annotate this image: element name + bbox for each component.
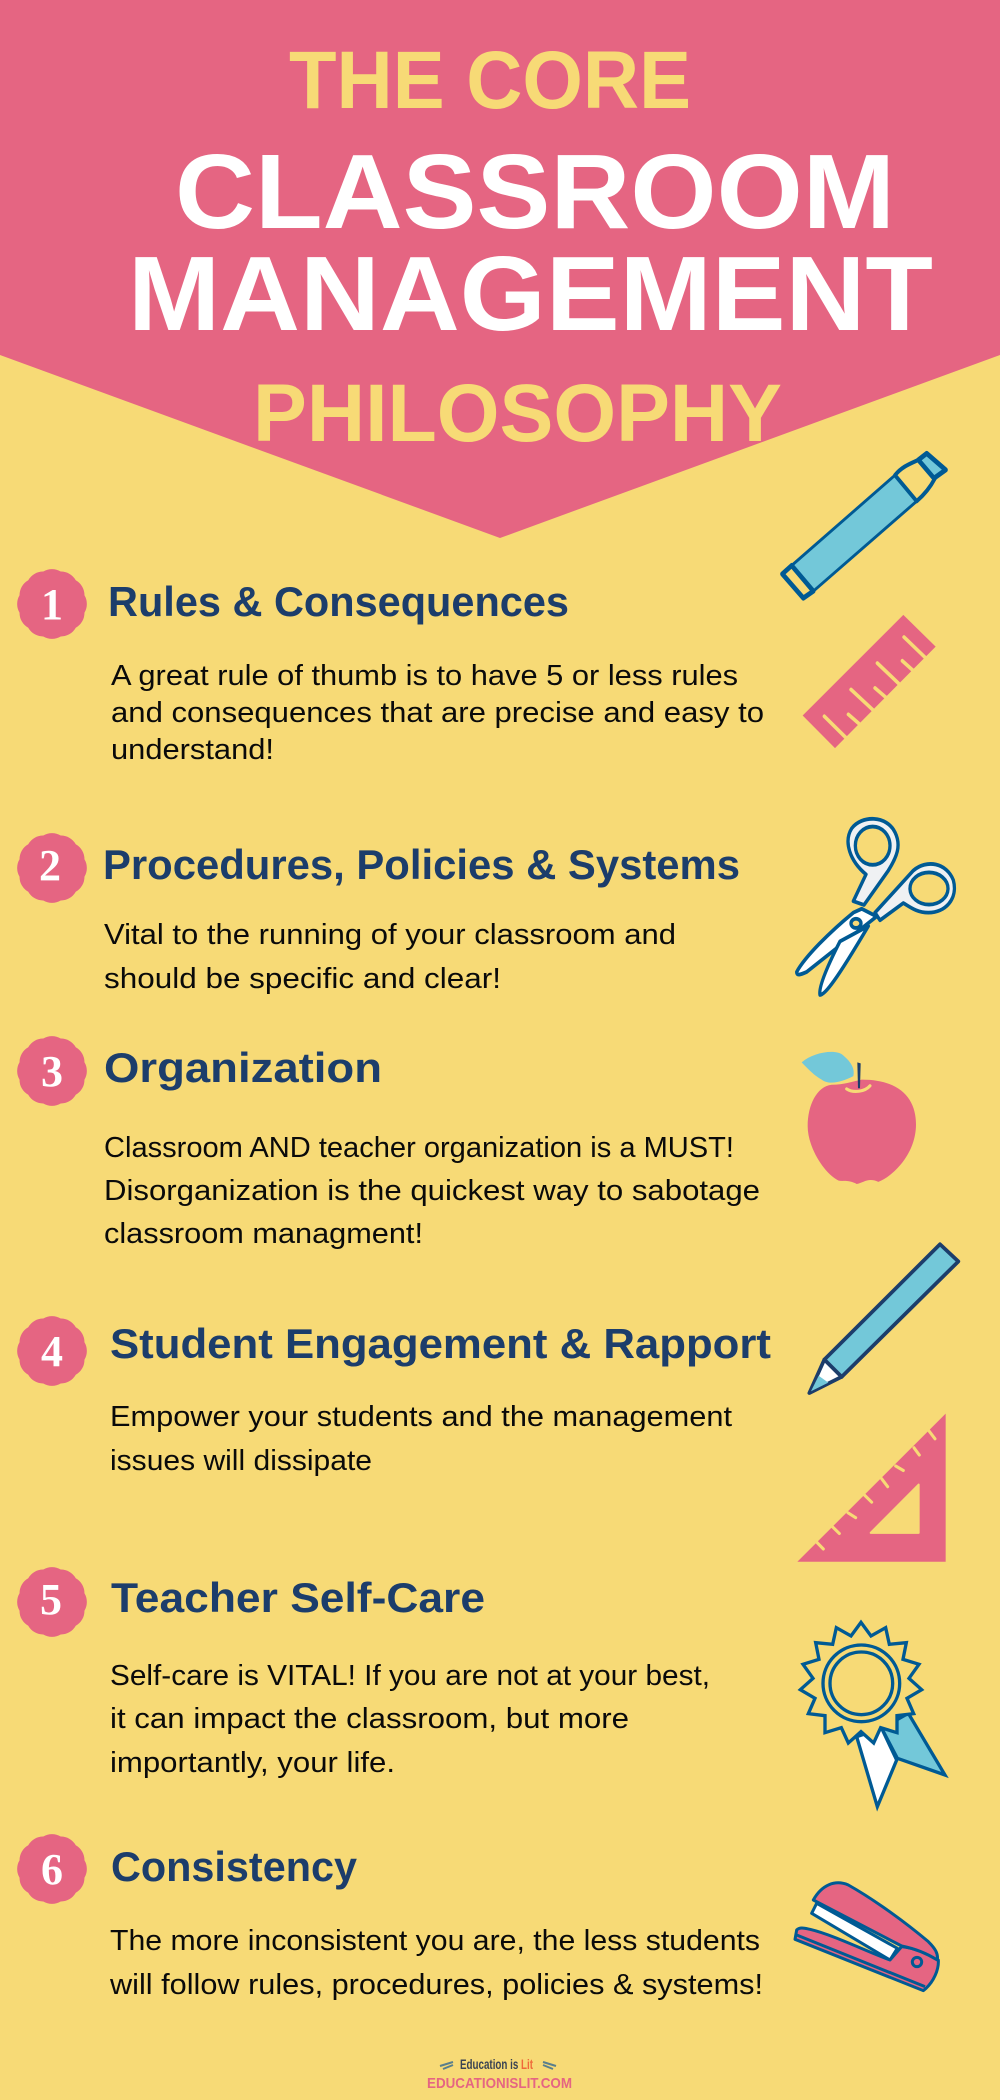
body text 1 [111, 660, 764, 766]
heading 1: Rules & Consequences [108, 578, 569, 625]
panel: student engagement and rapport [10, 1309, 771, 1477]
body text 4: issues will dissipate [110, 1445, 372, 1477]
panel: teacher self-care [10, 1560, 710, 1779]
icon: apple [802, 1052, 916, 1184]
heading 3: Organization [104, 1044, 382, 1091]
number badge 3: 3 [41, 1047, 63, 1096]
number badge 2 [10, 826, 94, 910]
heading 6: Consistency [111, 1843, 358, 1890]
panel: procedures, policies and systems [10, 826, 740, 995]
arrow marks right [543, 2062, 556, 2069]
body text 5: importantly, your life. [110, 1747, 395, 1779]
body text 5: Self-care is VITAL! If you are not at your best, [110, 1660, 710, 1692]
body text 3 [104, 1132, 760, 1250]
icon: scissors [797, 819, 954, 995]
body text 3: classroom managment! [104, 1218, 423, 1250]
icon: ruler [803, 615, 936, 748]
body text 6: will follow rules, procedures, policies & systems! [109, 1969, 763, 2001]
body text 4 [110, 1401, 732, 1477]
body text 6: The more inconsistent you are, the less students [110, 1925, 760, 1957]
title line: the core: THE CORE [289, 35, 691, 126]
icon: award ribbon [800, 1622, 945, 1807]
number badge 1 [10, 562, 94, 646]
number badge 6 [10, 1827, 94, 1911]
body text 1: and consequences that are precise and easy to [111, 697, 764, 729]
title [128, 35, 933, 459]
heading 5: Teacher Self-Care [111, 1574, 485, 1621]
icon: pencil [809, 1244, 958, 1393]
number badge 4: 4 [41, 1327, 63, 1376]
icon: set square [797, 1414, 946, 1562]
body text 2: should be specific and clear! [104, 963, 501, 995]
title line: classroom: CLASSROOM [175, 133, 895, 251]
footer logo [427, 2056, 572, 2092]
body text 2 [104, 919, 676, 995]
brand name: Education is Lit [460, 2056, 533, 2072]
heading 4: Student Engagement & Rapport [110, 1320, 771, 1367]
number badge 2: 2 [39, 841, 61, 890]
number badge 5: 5 [40, 1575, 62, 1624]
body text 3: Classroom AND teacher organization is a MUST! [104, 1132, 734, 1164]
website url: EDUCATIONISLIT.COM [427, 2075, 572, 2092]
number badge 3 [10, 1029, 94, 1113]
arrow marks left [440, 2062, 453, 2069]
body text 1: understand! [111, 734, 274, 766]
body text 3: Disorganization is the quickest way to sabotage [104, 1175, 760, 1207]
title line: management: MANAGEMENT [128, 235, 933, 353]
icon: marker [782, 453, 946, 598]
panel: rules and consequences [10, 562, 764, 766]
body text 5 [110, 1660, 710, 1779]
header banner [0, 0, 1000, 538]
number badge 1: 1 [41, 580, 63, 629]
body text 1: A great rule of thumb is to have 5 or less rules [111, 660, 738, 692]
icon: stapler [795, 1883, 938, 1991]
panel: organization [10, 1029, 760, 1250]
number badge 5 [10, 1560, 94, 1644]
body text 4: Empower your students and the management [110, 1401, 732, 1433]
number badge 6: 6 [41, 1845, 63, 1894]
body text 6 [109, 1925, 763, 2001]
title line: philosophy: PHILOSOPHY [253, 368, 782, 459]
number badge 4 [10, 1309, 94, 1393]
panel: consistency [10, 1827, 763, 2001]
body text 2: Vital to the running of your classroom and [104, 919, 676, 951]
heading 2: Procedures, Policies & Systems [103, 841, 740, 888]
body text 5: it can impact the classroom, but more [110, 1703, 629, 1735]
